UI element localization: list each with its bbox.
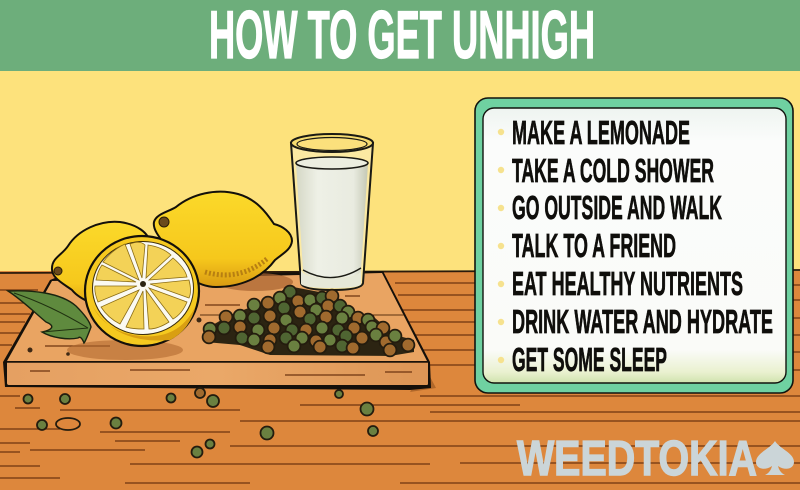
lemon segments xyxy=(95,242,190,329)
wooden table xyxy=(0,270,800,490)
tip 3 xyxy=(498,189,722,226)
icon: spade xyxy=(756,441,794,475)
tip 7: GET SOME SLEEP xyxy=(512,341,667,378)
scattered buds on table xyxy=(24,388,378,458)
title banner xyxy=(0,0,800,73)
pile of cannabis buds xyxy=(203,286,414,356)
tip 1 xyxy=(498,114,690,151)
leaf xyxy=(8,291,91,343)
tip 7 xyxy=(498,341,667,378)
glass of water xyxy=(291,134,373,290)
tip 4 xyxy=(498,227,676,264)
lemon: cut half xyxy=(85,236,199,346)
cutting board xyxy=(3,271,431,390)
tip 2 xyxy=(498,152,714,189)
yellow wall background xyxy=(0,70,800,275)
lemon: back whole xyxy=(154,192,292,287)
lemon: left whole xyxy=(52,222,150,310)
tips panel xyxy=(475,98,793,393)
